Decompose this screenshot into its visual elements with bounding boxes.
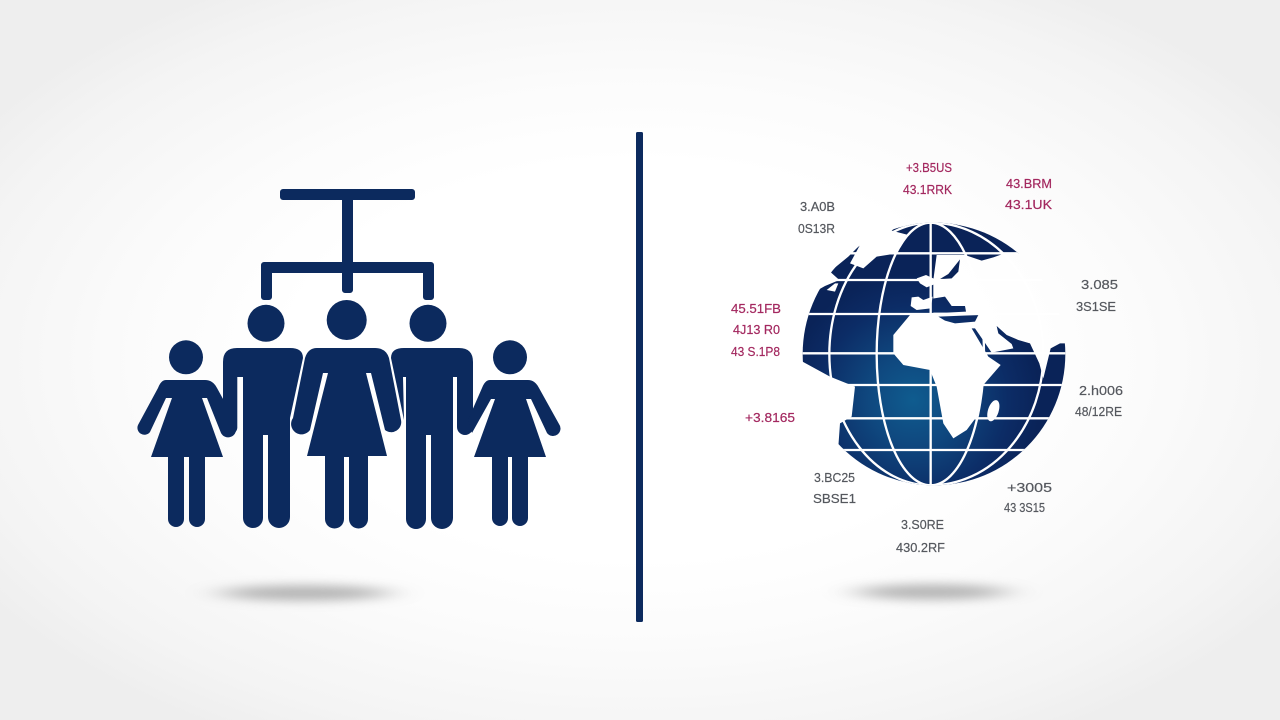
label: right lower: 48/12RE (1075, 404, 1122, 419)
label: top left: 3.A0B (800, 199, 835, 214)
label: top right: 43.BRM (1006, 176, 1052, 191)
figure: right girl (468, 340, 560, 526)
label: top centre (903, 160, 952, 197)
label: bottom right (1004, 480, 1052, 515)
central vertical divider (636, 132, 643, 622)
label: bottom left: 3.BC25 (814, 470, 855, 485)
label: right lower (1075, 383, 1123, 419)
label: top centre: 43.1RRK (903, 182, 952, 197)
Scandinavia (939, 259, 960, 279)
label: bottom right: +3005 (1007, 480, 1052, 495)
latitude and longitude grid (802, 222, 1066, 486)
Madagascar (987, 400, 1000, 422)
label: right upper: 3.085 (1081, 277, 1118, 292)
label: bottom left: SBSE1 (813, 491, 856, 506)
left inlet (827, 283, 838, 292)
label: top right (1005, 176, 1052, 212)
label: bottom centre: 3.S0RE (901, 517, 944, 532)
globe dark landmass and ocean (802, 222, 1066, 486)
label: right upper (1076, 277, 1118, 314)
figure: left man (223, 305, 303, 528)
British Isles (916, 275, 934, 288)
figure: centre woman (291, 300, 401, 528)
label: right lower: 2.h006 (1079, 383, 1123, 398)
label: bottom right: 43 3S15 (1004, 500, 1045, 515)
label: left group: 45.51FB (731, 301, 781, 316)
Mediterranean (933, 297, 966, 313)
hierarchy connector (261, 189, 434, 300)
label: left lower: +3.8165 (745, 410, 795, 425)
Iberia (911, 297, 933, 310)
label: top right: 43.1UK (1005, 197, 1052, 212)
Black Sea band (938, 315, 978, 323)
figure: left girl (137, 340, 236, 527)
label: left group: 4J13 R0 (733, 322, 780, 337)
label: top left (798, 199, 835, 236)
label: top left: 0S13R (798, 221, 835, 236)
label: top centre: +3.B5US (906, 160, 952, 175)
ground shadow under globe (856, 584, 1008, 600)
label: right upper: 3S1SE (1076, 299, 1116, 314)
figure: right man (391, 305, 473, 529)
label: bottom centre (896, 517, 945, 555)
label: left group (731, 301, 781, 359)
data labels around globe (731, 160, 1123, 555)
icon: globe (802, 222, 1066, 486)
infographic canvas (137, 132, 1122, 622)
ground shadow under people (220, 585, 390, 601)
label: bottom centre: 430.2RF (896, 540, 945, 555)
label: left group: 43 S.1P8 (731, 344, 780, 359)
icon: family hierarchy (137, 189, 560, 529)
label: bottom left (813, 470, 856, 506)
